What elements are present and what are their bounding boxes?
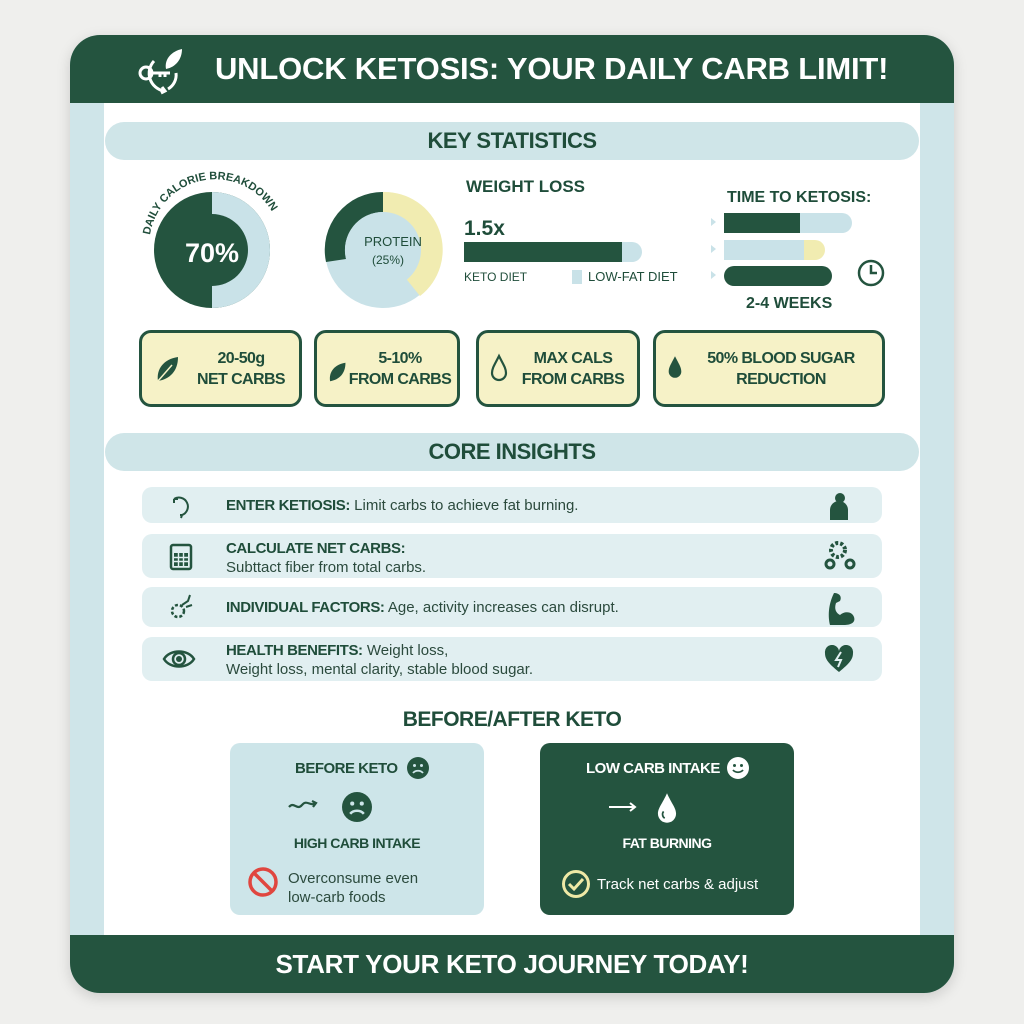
heading: key statistics: KEY STATISTICS (427, 128, 597, 153)
icon: key leaf (138, 49, 182, 94)
footer (70, 935, 954, 993)
heading: core insights: CORE INSIGHTS (428, 439, 596, 464)
time to ketosis bars (711, 189, 883, 312)
insight: calculate net carbs (142, 534, 882, 578)
panel: after keto: FAT BURNING (622, 835, 712, 851)
donut: daily calorie breakdown: 70% (185, 238, 239, 268)
insight: individual factors (142, 587, 882, 627)
stat box: blood sugar: REDUCTION (736, 371, 826, 388)
stat box: max cals (476, 330, 640, 407)
heading: key statistics (105, 122, 919, 160)
stat box: from carbs (314, 330, 460, 407)
heading: core insights (105, 433, 919, 471)
panel: after keto: LOW CARB INTAKE (586, 760, 720, 777)
heading: before/after: BEFORE/AFTER KETO (403, 708, 621, 731)
stat box: blood sugar: 50% BLOOD SUGAR (707, 350, 855, 367)
weight loss bar (464, 177, 678, 284)
insight: calculate net carbs: CALCULATE NET CARBS: (226, 540, 405, 557)
panel: after keto (540, 743, 794, 915)
charts (142, 172, 884, 312)
stat box: blood sugar (653, 330, 885, 407)
weight loss bar: 1.5x (464, 217, 505, 240)
stat box: net carbs: NET CARBS (197, 371, 285, 388)
panel: before keto: low-carb foods (288, 889, 386, 906)
panel: before keto: BEFORE KETO (295, 760, 398, 777)
header (70, 35, 954, 103)
insight: enter ketosis (142, 487, 882, 523)
weight loss bar: LOW-FAT DIET (588, 269, 678, 284)
insight: enter ketosis: ENTER KETIOSIS: Limit carbs to achieve fat burning. (226, 497, 578, 514)
stat box: max cals: MAX CALS (534, 350, 612, 367)
title: UNLOCK KETOSIS: YOUR DAILY CARB LIMIT! (215, 51, 888, 86)
insight: health benefits: Weight loss, mental clarity, stable blood sugar. (226, 661, 533, 678)
time to ketosis bars: TIME TO KETOSIS: (727, 189, 871, 206)
insight: health benefits: HEALTH BENEFITS: Weight loss, (226, 642, 448, 659)
stat box: net carbs: 20-50g (217, 350, 265, 367)
inner white panel (104, 103, 920, 935)
stat box: from carbs: 5-10% (378, 350, 422, 367)
insight: health benefits (142, 637, 882, 681)
panel: before keto: Overconsume even (288, 870, 418, 887)
insight: calculate net carbs: Subttact fiber from total carbs. (226, 559, 426, 576)
panel: after keto: Track net carbs & adjust (597, 876, 758, 893)
pie: protein: PROTEIN (364, 234, 422, 249)
time to ketosis bars: 2-4 WEEKS (746, 295, 833, 312)
stat box: from carbs: FROM CARBS (349, 371, 451, 388)
pie: protein: (25%) (372, 253, 404, 267)
donut: daily calorie breakdown: DAILY CALORIE BREAKDOWN (142, 172, 278, 234)
insight: individual factors: INDIVIDUAL FACTORS: Age, activity increases can disrupt. (226, 599, 619, 616)
panel: before keto (230, 743, 484, 915)
stat box: max cals: FROM CARBS (522, 371, 624, 388)
stat box: net carbs (139, 330, 302, 407)
pie: protein (325, 192, 443, 308)
panel: before keto: HIGH CARB INTAKE (294, 835, 420, 851)
weight loss bar: KETO DIET (464, 270, 528, 284)
donut: daily calorie breakdown (142, 172, 278, 308)
footer: START YOUR KETO JOURNEY TODAY! (275, 949, 749, 979)
weight loss bar: WEIGHT LOSS (466, 177, 585, 196)
